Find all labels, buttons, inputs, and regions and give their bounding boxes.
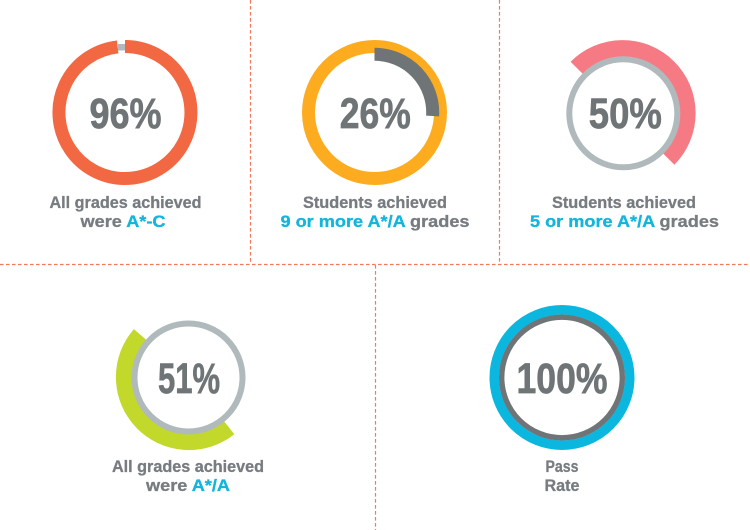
panel: 26% students 9 or more A*/A [280,46,470,231]
value: 51%: 51% [158,356,220,403]
donut: 51% green arc with grey ring [127,324,242,439]
value: 96%: 96% [90,91,162,138]
donut: 100% blue ring with grey ring [494,310,630,445]
donut: 96% orange ring [59,44,191,178]
panel: 51% all grades A*/A [112,324,264,495]
panel: 96% all grades A*-C [50,44,202,231]
label: all grades achieved were A*/A: All grades achieved [112,458,264,476]
label: pass rate: Pass [546,458,578,476]
label: all grades achieved were A*-C: were A*-C [79,213,166,231]
value: 50%: 50% [589,91,662,138]
value: 100%: 100% [516,356,608,403]
label: all grades achieved were A*/A [112,458,264,495]
label: students achieved 9 or more A*/A grades: Students achieved [303,194,447,212]
label: all grades achieved were A*-C: All grades achieved [50,194,202,212]
label: all grades achieved were A*-C [50,194,202,231]
label: students achieved 5 or more A*/A grades: Students achieved [552,194,696,212]
label: students achieved 5 or more A*/A grades: 5 or more A*/A grades [530,213,719,231]
label: students achieved 9 or more A*/A grades: 9 or more A*/A grades [280,213,470,231]
panel: 100% pass rate [494,310,630,495]
donut: 50% pink arc with grey ring [569,51,685,167]
label: pass rate: Rate [544,477,580,495]
label: pass rate [544,458,580,495]
label: students achieved 9 or more A*/A grades [280,194,470,231]
label: students achieved 5 or more A*/A grades [530,194,719,231]
value: 26%: 26% [340,91,411,138]
label: all grades achieved were A*/A: were A*/A [145,477,230,495]
donut: 26% orange ring with grey arc [308,46,440,178]
panel: 50% students 5 or more A*/A [530,51,719,231]
